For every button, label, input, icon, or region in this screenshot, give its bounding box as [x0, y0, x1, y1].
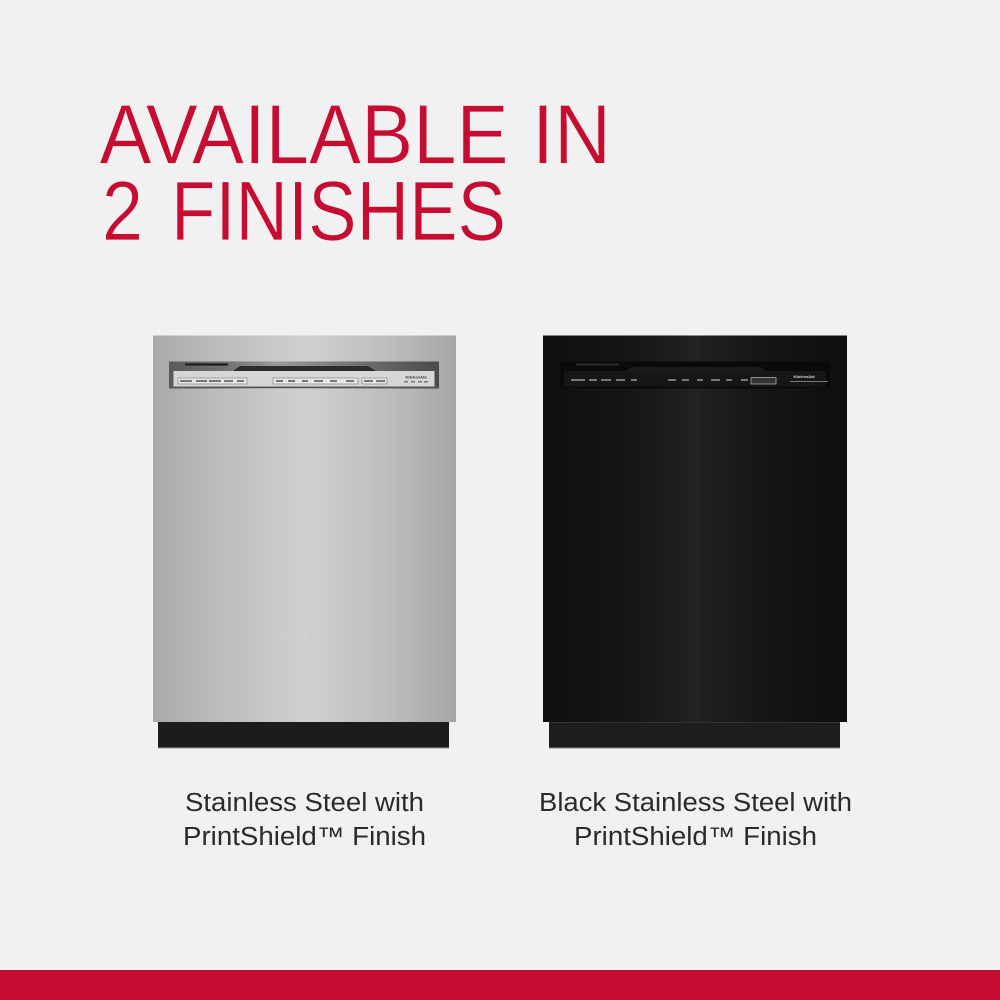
door: [153, 336, 456, 722]
title: AVAILABLE: [100, 88, 508, 182]
caption: black stainless steel: PrintShield™ Finish: [574, 823, 817, 851]
title: IN: [532, 88, 611, 182]
brand mark: KitchenAid: [793, 374, 815, 379]
toe kick: [549, 722, 840, 748]
brand mark: KitchenAid: [405, 374, 427, 380]
door: [543, 336, 847, 722]
toe kick: [158, 722, 449, 748]
caption: stainless steel: [183, 789, 426, 851]
product: black stainless dishwasher: [543, 336, 847, 748]
title: [100, 88, 611, 258]
caption: black stainless steel: Black Stainless Steel with: [539, 789, 852, 817]
control panel: [560, 362, 830, 388]
caption: stainless steel: Stainless Steel with: [185, 789, 424, 817]
caption: stainless steel: PrintShield™ Finish: [183, 823, 426, 851]
product: stainless steel dishwasher: [153, 336, 456, 748]
title: FINISHES: [171, 164, 506, 258]
caption: black stainless steel: [539, 789, 852, 851]
title: 2: [102, 164, 143, 258]
footer bar: [0, 970, 1000, 1000]
control panel: [169, 362, 439, 388]
